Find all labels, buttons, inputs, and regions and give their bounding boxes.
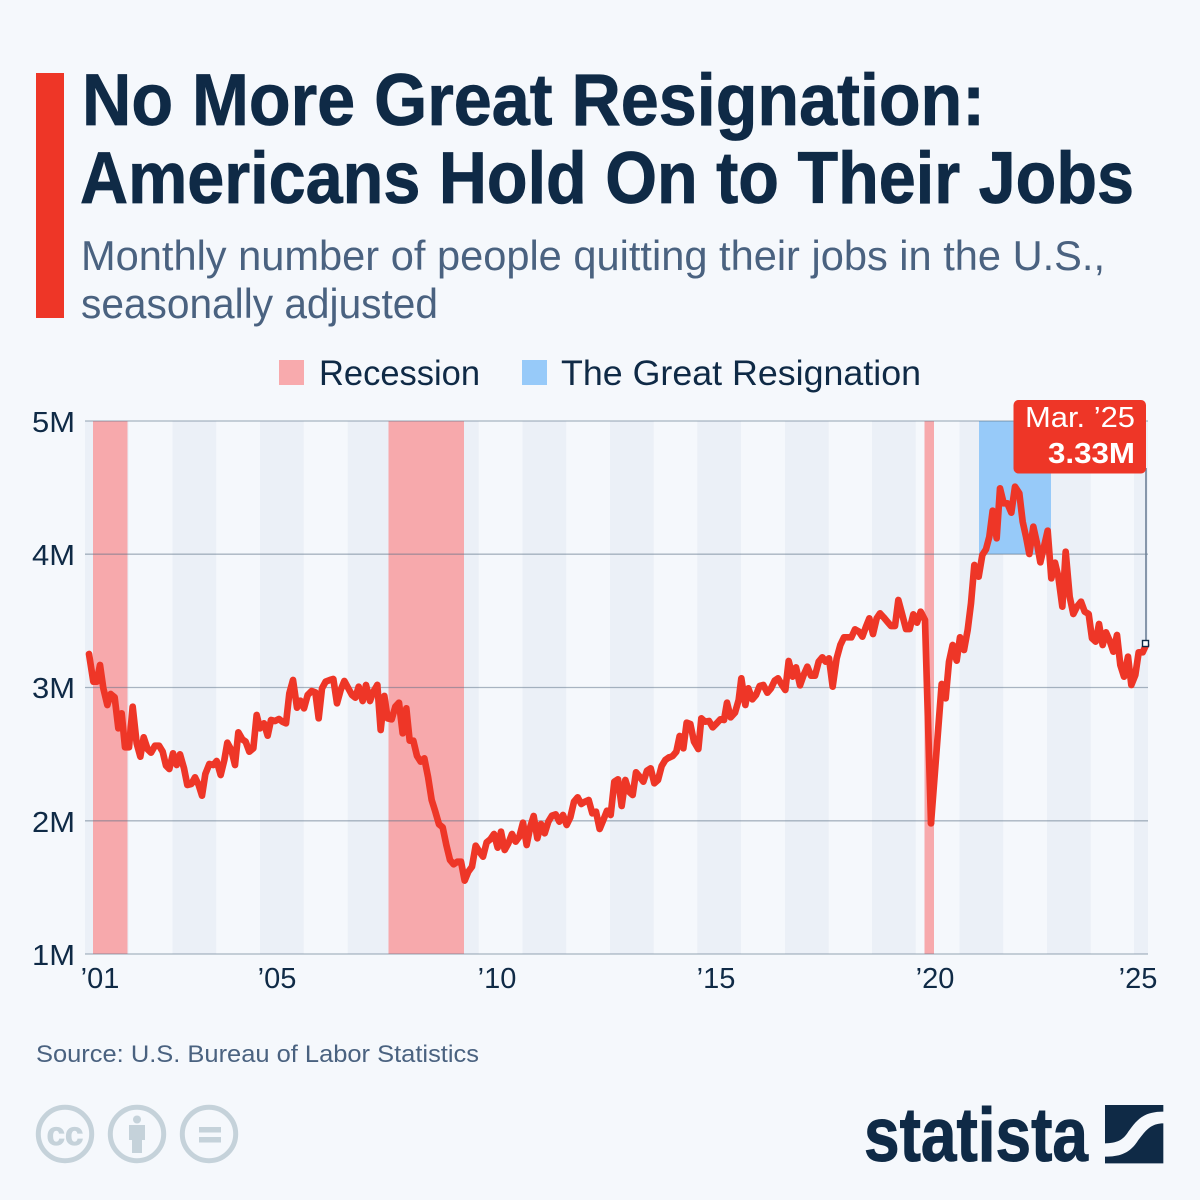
icon: creative commons [38, 1107, 92, 1161]
y axis labels: 5M [32, 407, 75, 439]
icon: attribution [110, 1107, 164, 1161]
y axis labels: 2M [32, 807, 75, 839]
gridlines [85, 421, 1148, 954]
data line [89, 487, 1146, 881]
icon: no derivatives [182, 1107, 236, 1161]
y axis labels: 3M [32, 673, 75, 705]
title [80, 60, 1134, 219]
title: No More Great Resignation: [82, 60, 985, 141]
icon: creative commons: cc [47, 1115, 83, 1152]
y axis labels [32, 407, 75, 972]
x axis labels: ’01 [81, 963, 119, 995]
x axis labels [81, 963, 1157, 995]
x axis labels: ’15 [697, 963, 735, 995]
source: Source: U.S. Bureau of Labor Statistics [36, 1041, 479, 1068]
y axis labels: 4M [32, 540, 75, 572]
x axis labels: ’05 [258, 963, 296, 995]
statista logo: statista [864, 1093, 1089, 1178]
recession periods [93, 421, 934, 954]
y axis labels: 1M [32, 940, 75, 972]
subtitle: Monthly number of people quitting their jobs in the U.S., [81, 232, 1105, 279]
x axis labels: ’20 [916, 963, 954, 995]
great resignation period [979, 421, 1051, 554]
legend: Recession [319, 354, 480, 393]
callout: March 2025 value: Mar. ’25 [1025, 402, 1135, 434]
legend: The Great Resignation [561, 354, 921, 393]
legend [279, 354, 921, 393]
subtitle [81, 232, 1105, 327]
chart: monthly quits line chart [32, 400, 1157, 995]
subtitle: seasonally adjusted [81, 280, 438, 327]
callout: March 2025 value [1014, 400, 1148, 646]
callout: March 2025 value: 3.33M [1048, 438, 1135, 470]
year bands [85, 421, 1148, 954]
x axis labels: ’10 [478, 963, 516, 995]
x axis labels: ’25 [1119, 963, 1157, 995]
accent bar [36, 73, 64, 318]
